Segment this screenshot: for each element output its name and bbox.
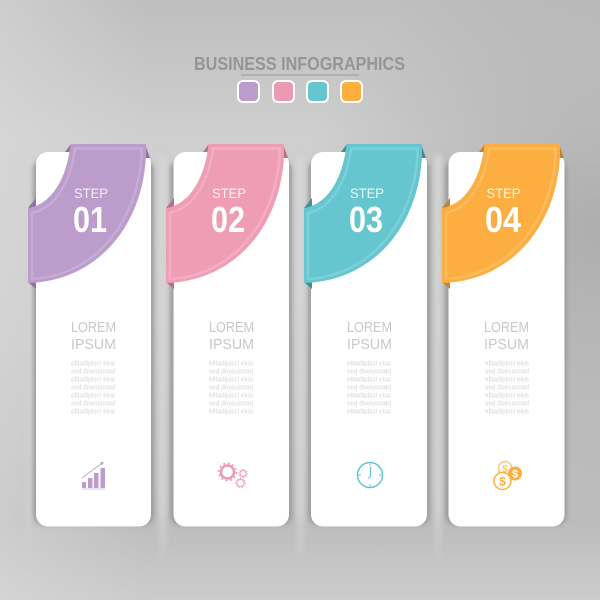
body text: sed doeiusmod [485,400,529,408]
step label: STEP [212,185,246,201]
body text [485,360,529,416]
body text: elitadipisci eius [209,376,253,384]
body text: elitadipisci eius [347,360,391,368]
step number: 04 [485,199,521,240]
panel: step 03: IPSUM [347,337,392,353]
icon: coins: $ [499,474,506,488]
panel: step 01 [28,144,151,526]
body text: elitadipisci eius [71,408,115,416]
step number: 01 [73,199,107,240]
body text: elitadipisci eius [347,376,391,384]
step number: 02 [211,199,245,240]
body text: elitadipisci eius [347,392,391,400]
title: BUSINESS INFOGRAPHICS [194,54,405,74]
body text [71,360,115,416]
ribbon: step 01 [28,144,150,289]
body text: elitadipisci eius [485,376,529,384]
body text: sed doeiusmod [347,400,391,408]
body text: sed doeiusmod [71,368,115,376]
body text: elitadipisci eius [209,392,253,400]
body text [209,360,253,416]
panel: step 04 [442,144,564,526]
body text: sed doeiusmod [71,384,115,392]
heading: LOREM [347,320,392,336]
step number: 03 [349,199,383,240]
body text: elitadipisci eius [209,408,253,416]
body text: elitadipisci eius [209,360,253,368]
panel: step 02: IPSUM [209,337,254,353]
body text: sed doeiusmod [209,400,253,408]
heading: LOREM [71,320,116,336]
icon: bar chart [82,462,105,490]
body text: elitadipisci eius [71,376,115,384]
body text: sed doeiusmod [71,400,115,408]
body text: elitadipisci eius [71,360,115,368]
icon: coins: $ [512,468,518,480]
body text: sed doeiusmod [347,368,391,376]
ribbon: step 02 [166,144,288,289]
icon: gears [219,463,247,488]
body text: sed doeiusmod [485,384,529,392]
body text: elitadipisci eius [71,392,115,400]
body text: elitadipisci eius [485,408,529,416]
body text: sed doeiusmod [485,368,529,376]
panel: step 04: IPSUM [484,337,529,353]
panel: step 02 [166,144,289,526]
heading: LOREM [209,320,254,336]
ribbon: step 03 [304,144,426,289]
step label: STEP [74,185,108,201]
panel: step 03 [304,144,427,526]
body text: sed doeiusmod [347,384,391,392]
ribbon: step 04 [442,144,564,289]
legend swatches [238,81,362,102]
heading: LOREM [484,320,529,336]
body text: elitadipisci eius [347,408,391,416]
icon: clock [358,462,382,488]
panel: step 01: IPSUM [71,337,116,353]
body text: elitadipisci eius [485,392,529,400]
icon: coins [494,462,522,490]
body text: sed doeiusmod [209,384,253,392]
body text [347,360,391,416]
icon: coins: $ [502,464,508,475]
body text: elitadipisci eius [485,360,529,368]
step label: STEP [350,185,384,201]
body text: sed doeiusmod [209,368,253,376]
step label: STEP [486,185,520,201]
